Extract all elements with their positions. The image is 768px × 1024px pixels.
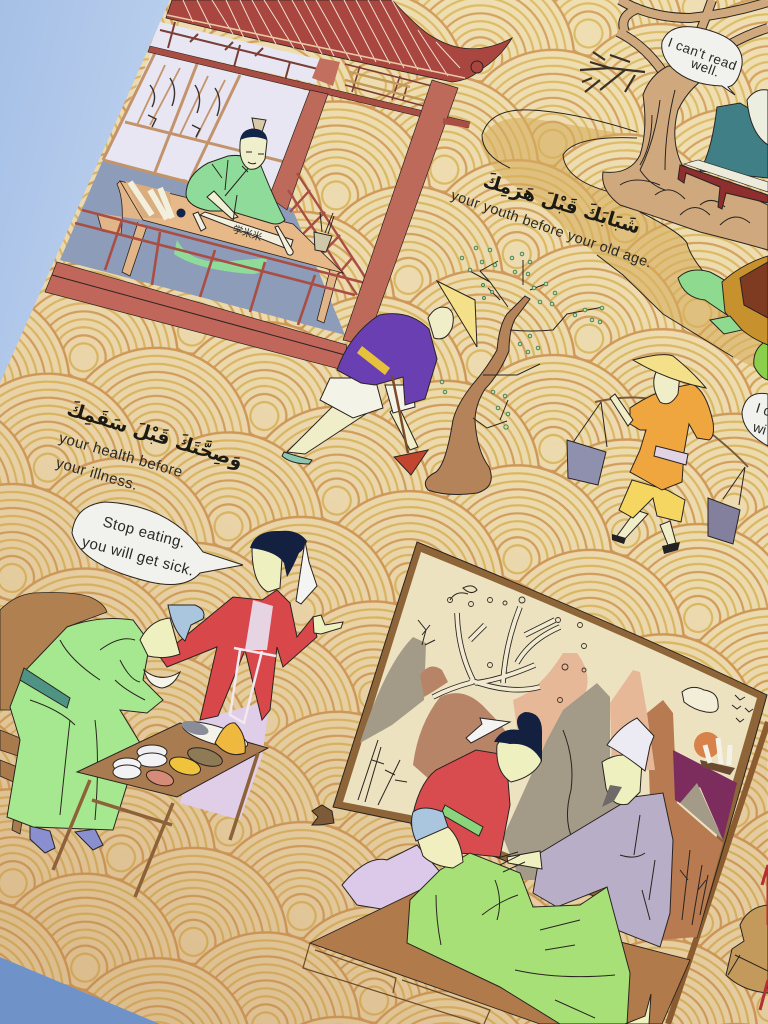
hat xyxy=(607,718,654,771)
scrolls on desk xyxy=(130,182,293,255)
illustration: blossoming tree xyxy=(425,246,604,494)
noodle bowl xyxy=(144,670,180,688)
face xyxy=(497,733,541,782)
carrier head xyxy=(654,369,680,404)
balcony rail xyxy=(75,210,365,325)
lower green flipper xyxy=(754,340,768,380)
illustration: woman in red xyxy=(160,531,343,820)
illustration: framed screen painting xyxy=(333,542,767,940)
old man head xyxy=(747,90,768,145)
green robe xyxy=(7,619,163,830)
chess table xyxy=(678,165,768,209)
feet xyxy=(30,826,103,853)
old man robe xyxy=(700,103,768,178)
brush pot xyxy=(314,212,334,252)
hand xyxy=(507,851,542,869)
speech bubble: I can't read well: well. xyxy=(688,55,722,80)
farmer head xyxy=(428,307,453,339)
birds xyxy=(732,695,753,722)
scholar head xyxy=(240,118,267,172)
face xyxy=(417,826,463,868)
feet xyxy=(625,994,651,1024)
chair xyxy=(0,592,107,710)
stool xyxy=(726,865,768,1010)
reeds xyxy=(680,850,708,925)
speech bubble: stop eating xyxy=(72,502,243,585)
branch outlines xyxy=(618,0,768,75)
speech bubble: stop eating: Stop eating. xyxy=(101,513,187,552)
illustration: bed platform xyxy=(303,890,690,1024)
farmer legs xyxy=(287,400,375,454)
illustration: old man at chess table xyxy=(678,90,768,209)
peach right peak xyxy=(610,670,655,770)
heading: Arabic phrase, youth: شَبَابَكَ قَبْلَ هَرَمِكَ xyxy=(480,170,643,239)
carrier hat xyxy=(633,355,706,388)
yoke pole xyxy=(595,397,748,467)
illustration: patient xyxy=(407,808,651,1024)
lilac skirt xyxy=(180,700,270,820)
lilac skirt xyxy=(342,845,447,910)
red robe xyxy=(411,750,510,857)
spade xyxy=(392,375,408,453)
right post xyxy=(343,80,458,345)
illustration: woman in painting scene xyxy=(342,712,542,910)
left mountain xyxy=(360,637,426,743)
dark twig cluster xyxy=(580,52,645,92)
boat and sun xyxy=(694,732,735,775)
illustration: man eating with chair and table xyxy=(0,592,268,897)
beam xyxy=(148,46,470,128)
left brown mountain xyxy=(413,666,527,800)
carrier trousers xyxy=(619,480,685,522)
painted tree xyxy=(418,586,586,702)
speech bubble: partial right: wi xyxy=(750,418,768,438)
green robe xyxy=(407,853,630,1024)
text: health translation: your illness. xyxy=(54,455,140,494)
illustration: farmer digging xyxy=(282,281,477,475)
robe xyxy=(533,793,673,947)
face xyxy=(252,546,282,592)
right page beyond gutter xyxy=(668,722,768,1024)
hair xyxy=(250,531,307,577)
hill band: golden ground xyxy=(480,110,768,375)
pavilion floor and wall xyxy=(60,160,345,335)
carrier legs xyxy=(614,510,676,545)
peach peak xyxy=(513,653,588,760)
corner: blue surface bottom left xyxy=(0,950,170,1024)
speech bubble: I can't read well: I can't read xyxy=(666,35,739,74)
central taupe mountain xyxy=(503,683,647,880)
illustration: turtle xyxy=(678,256,768,380)
frame xyxy=(333,542,767,937)
roof xyxy=(166,0,512,82)
frieze lattice xyxy=(150,22,440,109)
dishes xyxy=(113,716,250,789)
farmer hat xyxy=(437,281,477,347)
illustration: old tree xyxy=(580,0,768,250)
head and neck xyxy=(678,270,738,322)
staircase rail xyxy=(288,173,367,295)
shell xyxy=(722,256,768,345)
writing desk xyxy=(97,181,343,323)
ribbon xyxy=(296,541,317,604)
trunk and roots xyxy=(603,66,768,250)
bamboo xyxy=(358,740,407,805)
illustration: pavilion with scholar xyxy=(45,0,512,370)
right brown mountain xyxy=(647,700,723,940)
hand xyxy=(313,615,343,634)
scholar body xyxy=(186,155,285,224)
carrier arm xyxy=(610,394,633,426)
hair xyxy=(494,712,542,762)
text: health translation: your health before xyxy=(57,430,185,481)
speech bubble: partial right xyxy=(742,393,768,446)
scholar legs xyxy=(174,240,267,274)
left post xyxy=(269,90,328,210)
foot xyxy=(710,316,742,334)
window panel xyxy=(103,50,312,200)
text: youth translation: your youth before your old age. xyxy=(449,188,654,272)
speech bubble: stop eating: you will get sick. xyxy=(80,533,196,580)
ornament: screen foot xyxy=(312,805,334,825)
scrolls on desk: 学米米 xyxy=(231,221,264,244)
small taupe hill xyxy=(680,783,723,840)
speech bubble: I can't read well xyxy=(662,27,742,95)
left bucket xyxy=(567,402,607,485)
cloud xyxy=(682,687,718,712)
farmer robe xyxy=(337,314,437,405)
hat xyxy=(168,605,204,641)
heading: Arabic phrase, health: وَصِحَّتَكَ قَبْلَ سَقَمِكَ xyxy=(64,398,245,472)
doctor herb hand xyxy=(498,852,525,872)
red robe xyxy=(160,590,317,720)
illustration: water carrier xyxy=(567,355,748,554)
head xyxy=(140,618,180,658)
face xyxy=(602,755,642,805)
platform xyxy=(45,262,347,370)
carrier tunic xyxy=(630,384,714,490)
table xyxy=(53,723,268,897)
illustration: doctor xyxy=(507,718,673,947)
hat xyxy=(412,808,448,841)
right bucket xyxy=(708,467,745,544)
beard xyxy=(602,785,622,807)
paper xyxy=(343,552,757,925)
farmer trousers xyxy=(320,378,415,418)
purple land xyxy=(673,750,737,840)
ribbon xyxy=(466,718,510,743)
